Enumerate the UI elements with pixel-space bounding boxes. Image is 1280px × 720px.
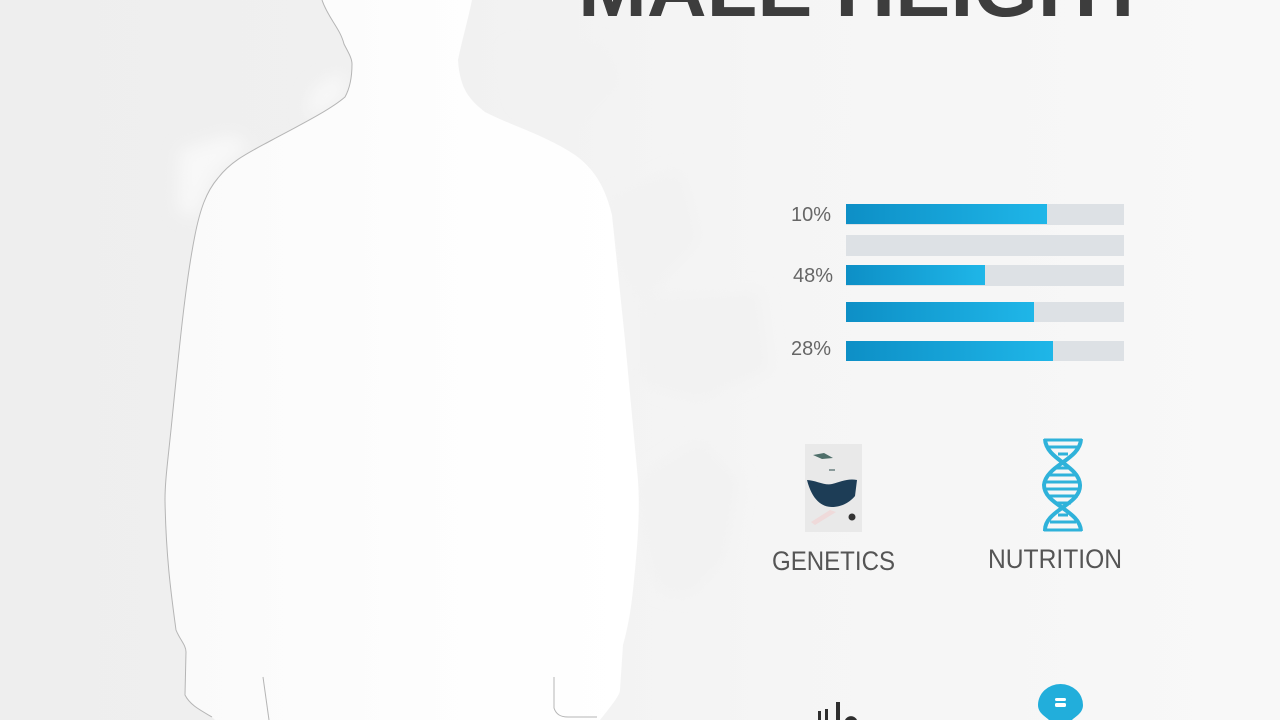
shoulder highlights [178,72,346,218]
nutrition label: NUTRITION [988,544,1122,574]
bar row 2 [846,235,1124,256]
male silhouette [165,0,639,720]
lightbulb icon [1038,684,1083,720]
bar row 1 [791,204,1124,226]
silhouette outline [165,0,597,720]
genetics label: GENETICS [772,546,895,576]
dna icon [1044,439,1082,531]
background world map [510,45,770,595]
bar row 1: 10% [791,204,831,226]
bar row 3 [793,265,1124,287]
bar chart [791,204,1124,361]
genetics icon [805,444,862,532]
bar row 5: 28% [791,338,831,360]
bar row 3: 48% [793,265,833,287]
bar icon bottom [818,702,857,720]
bar row 5 [791,338,1124,361]
bar row 4 [846,302,1124,322]
